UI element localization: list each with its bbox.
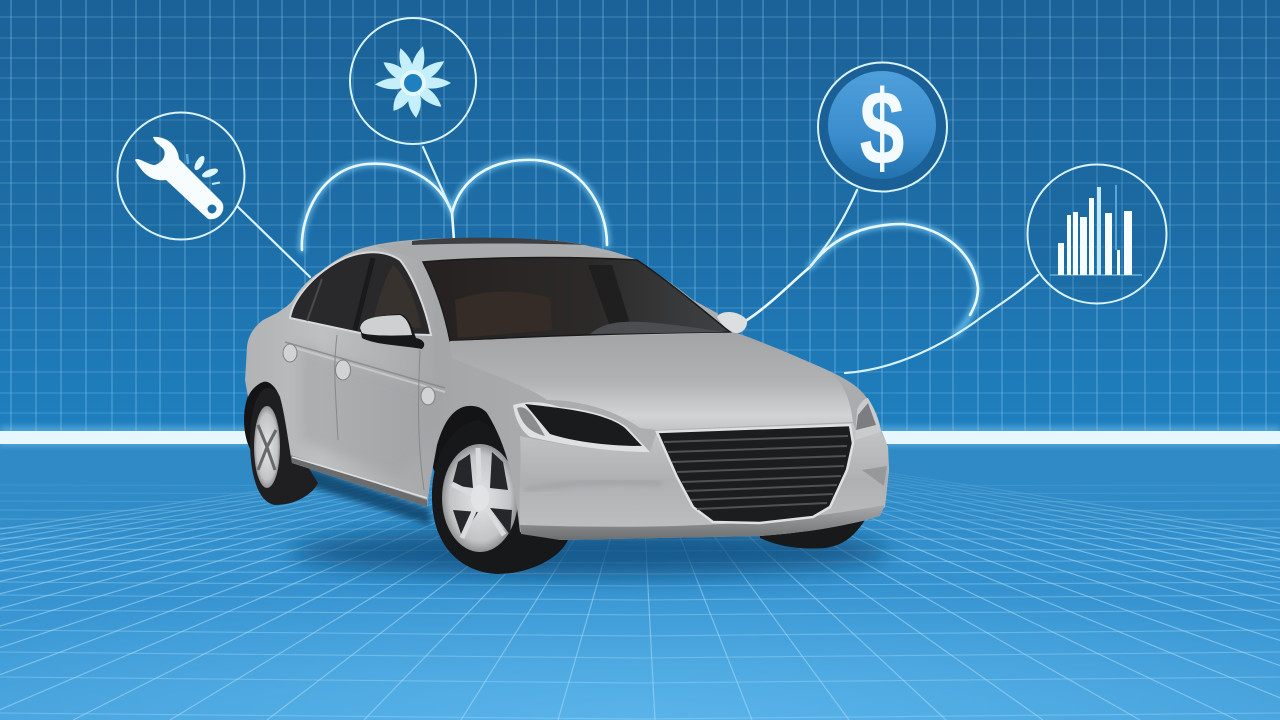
glowing connector curves [238, 147, 1038, 373]
far front wheel [760, 520, 865, 548]
ground shadow [290, 465, 890, 576]
front bumper [519, 423, 889, 540]
side windows [290, 252, 431, 335]
floor with perspective grid [0, 435, 1280, 720]
mirrors [360, 312, 747, 349]
icon: dollar coin: $ [859, 69, 905, 186]
front wheel [430, 402, 568, 574]
door handles [283, 344, 435, 405]
door shading [300, 348, 407, 472]
icon: dollar coin [818, 62, 947, 192]
grille [657, 425, 853, 523]
horizon glow line [0, 426, 1280, 446]
background wall with grid [0, 0, 1280, 432]
roof highlight and sunroof [375, 240, 640, 262]
windshield [423, 258, 730, 341]
icon: flower gear [350, 18, 476, 144]
rear wheel [244, 378, 318, 505]
sill [290, 455, 427, 512]
icon: wrench [118, 112, 244, 240]
car body [245, 238, 889, 540]
hood [450, 333, 853, 430]
headlights [513, 398, 881, 452]
icon: bar chart [1028, 164, 1166, 304]
car [244, 238, 890, 576]
